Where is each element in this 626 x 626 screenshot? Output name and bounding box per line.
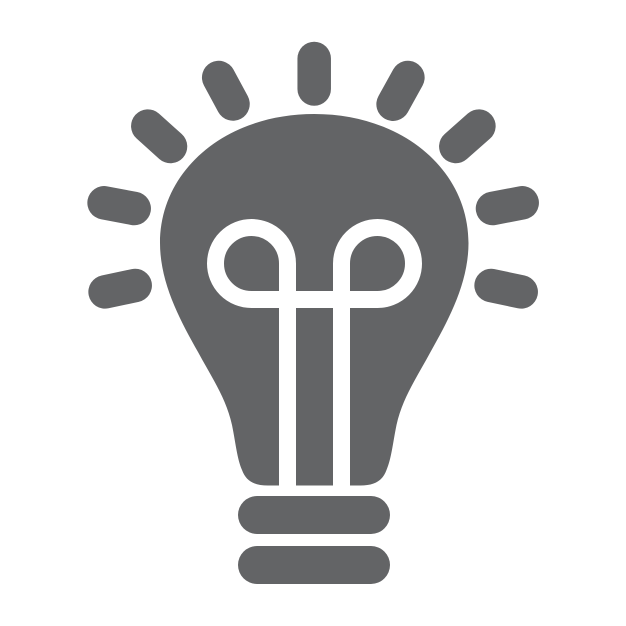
screw base xyxy=(238,496,390,584)
rays xyxy=(104,58,522,292)
bulb glass xyxy=(160,114,468,486)
filament xyxy=(216,228,414,487)
